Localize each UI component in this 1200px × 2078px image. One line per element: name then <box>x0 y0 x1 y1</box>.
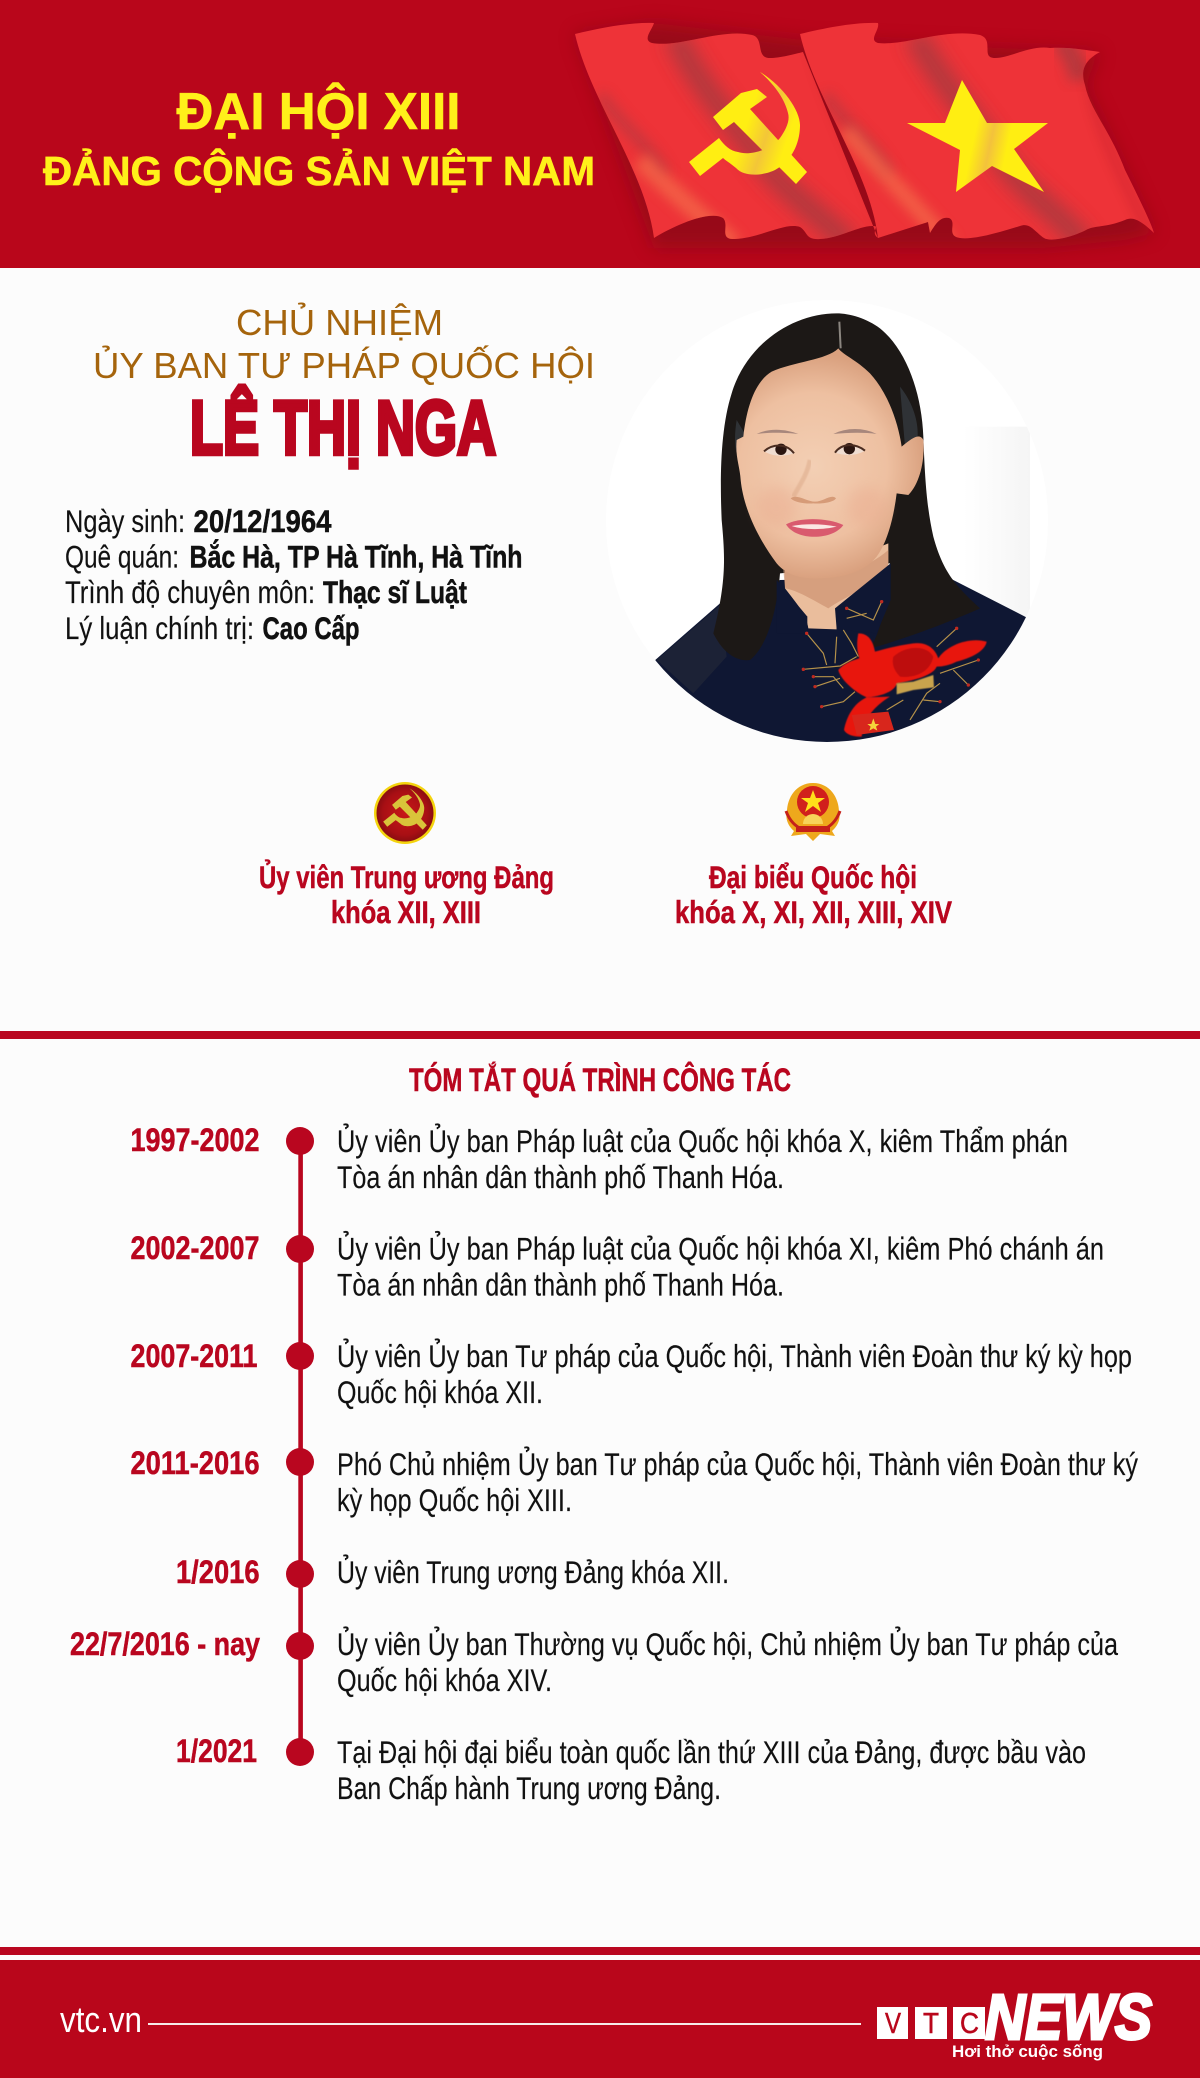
personal details: Quê quán: <box>65 538 179 574</box>
logo: VTC News: T <box>923 2008 939 2040</box>
footer bar <box>0 1960 1200 2078</box>
personal details: Lý luận chính trị: <box>65 610 254 646</box>
site url: vtc.vn <box>60 1999 142 2040</box>
assembly term text: khóa X, XI, XII, XIII, XIV <box>675 894 952 930</box>
icon: waving flags <box>560 10 1170 250</box>
personal details <box>65 503 522 646</box>
timeline entry 1/2016 <box>176 1554 729 1590</box>
logo: VTC News: NEWS <box>985 1981 1152 2053</box>
timeline entry 1997-2002 <box>130 1122 1068 1195</box>
logo: VTC News <box>877 1981 1152 2061</box>
timeline axis <box>286 1127 314 1766</box>
title line 1: ĐẠI HỘI XIII <box>176 82 460 141</box>
icon: yellow star <box>907 80 1048 192</box>
timeline entry 2002-2007 <box>130 1230 1104 1302</box>
timeline entry 2007-2011: Quốc hội khóa XII. <box>337 1374 543 1410</box>
personal details: Bắc Hà, TP Hà Tĩnh, Hà Tĩnh <box>190 538 522 574</box>
timeline entry 2007-2011: 2007-2011 <box>130 1338 258 1374</box>
icon: national emblem <box>786 783 840 841</box>
national assembly block <box>675 783 952 930</box>
personal details: Cao Cấp <box>262 610 360 646</box>
name: LÊ THỊ NGA <box>190 385 496 471</box>
personal details: 20/12/1964 <box>194 503 332 539</box>
position line 2: ỦY BAN TƯ PHÁP QUỐC HỘI <box>93 344 595 386</box>
timeline entry 1/2021 <box>176 1733 1086 1806</box>
icon: hammer and sickle <box>689 72 807 184</box>
title line 2: ĐẢNG CỘNG SẢN VIỆT NAM <box>43 148 595 194</box>
timeline entry 1/2016: Ủy viên Trung ương Đảng khóa XII. <box>337 1554 729 1590</box>
assembly role text: Đại biểu Quốc hội <box>709 859 917 895</box>
portrait photo <box>655 313 1026 742</box>
timeline section heading: TÓM TẮT QUÁ TRÌNH CÔNG TÁC <box>409 1062 791 1098</box>
position line 1: CHỦ NHIỆM <box>236 301 443 343</box>
timeline entry 2011-2016 <box>130 1445 1138 1518</box>
timeline entry 1/2021: Ban Chấp hành Trung ương Đảng. <box>337 1770 721 1806</box>
timeline entry 1997-2002: Tòa án nhân dân thành phố Thanh Hóa. <box>337 1159 784 1195</box>
timeline entry 22/7/2016 - nay <box>70 1626 1118 1698</box>
timeline entry 2011-2016: 2011-2016 <box>130 1445 260 1481</box>
personal details: Thạc sĩ Luật <box>323 574 467 610</box>
timeline entry 1997-2002: 1997-2002 <box>130 1122 260 1158</box>
logo: VTC News: C <box>960 2008 979 2040</box>
timeline entry 2007-2011 <box>130 1338 1132 1410</box>
timeline entry 1/2016: 1/2016 <box>176 1554 260 1590</box>
timeline entry 22/7/2016 - nay: Quốc hội khóa XIV. <box>337 1662 552 1698</box>
profile heading <box>93 301 595 471</box>
timeline entry 22/7/2016 - nay: 22/7/2016 - nay <box>70 1626 260 1662</box>
timeline entry 1/2021: 1/2021 <box>176 1733 257 1769</box>
header banner <box>0 0 1200 268</box>
party membership block <box>259 782 554 930</box>
timeline entry 2011-2016: kỳ họp Quốc hội XIII. <box>337 1482 572 1518</box>
logo: VTC News: Hơi thở cuộc sống <box>952 2043 1103 2061</box>
icon: party emblem <box>374 782 436 844</box>
party term text: khóa XII, XIII <box>331 894 481 930</box>
timeline entry 2002-2007: 2002-2007 <box>130 1230 260 1266</box>
logo: VTC News: V <box>885 2008 902 2040</box>
personal details: Trình độ chuyên môn: <box>65 574 315 610</box>
party role text: Ủy viên Trung ương Đảng <box>259 859 554 895</box>
personal details: Ngày sinh: <box>65 503 185 539</box>
timeline entry 2002-2007: Tòa án nhân dân thành phố Thanh Hóa. <box>337 1266 784 1302</box>
